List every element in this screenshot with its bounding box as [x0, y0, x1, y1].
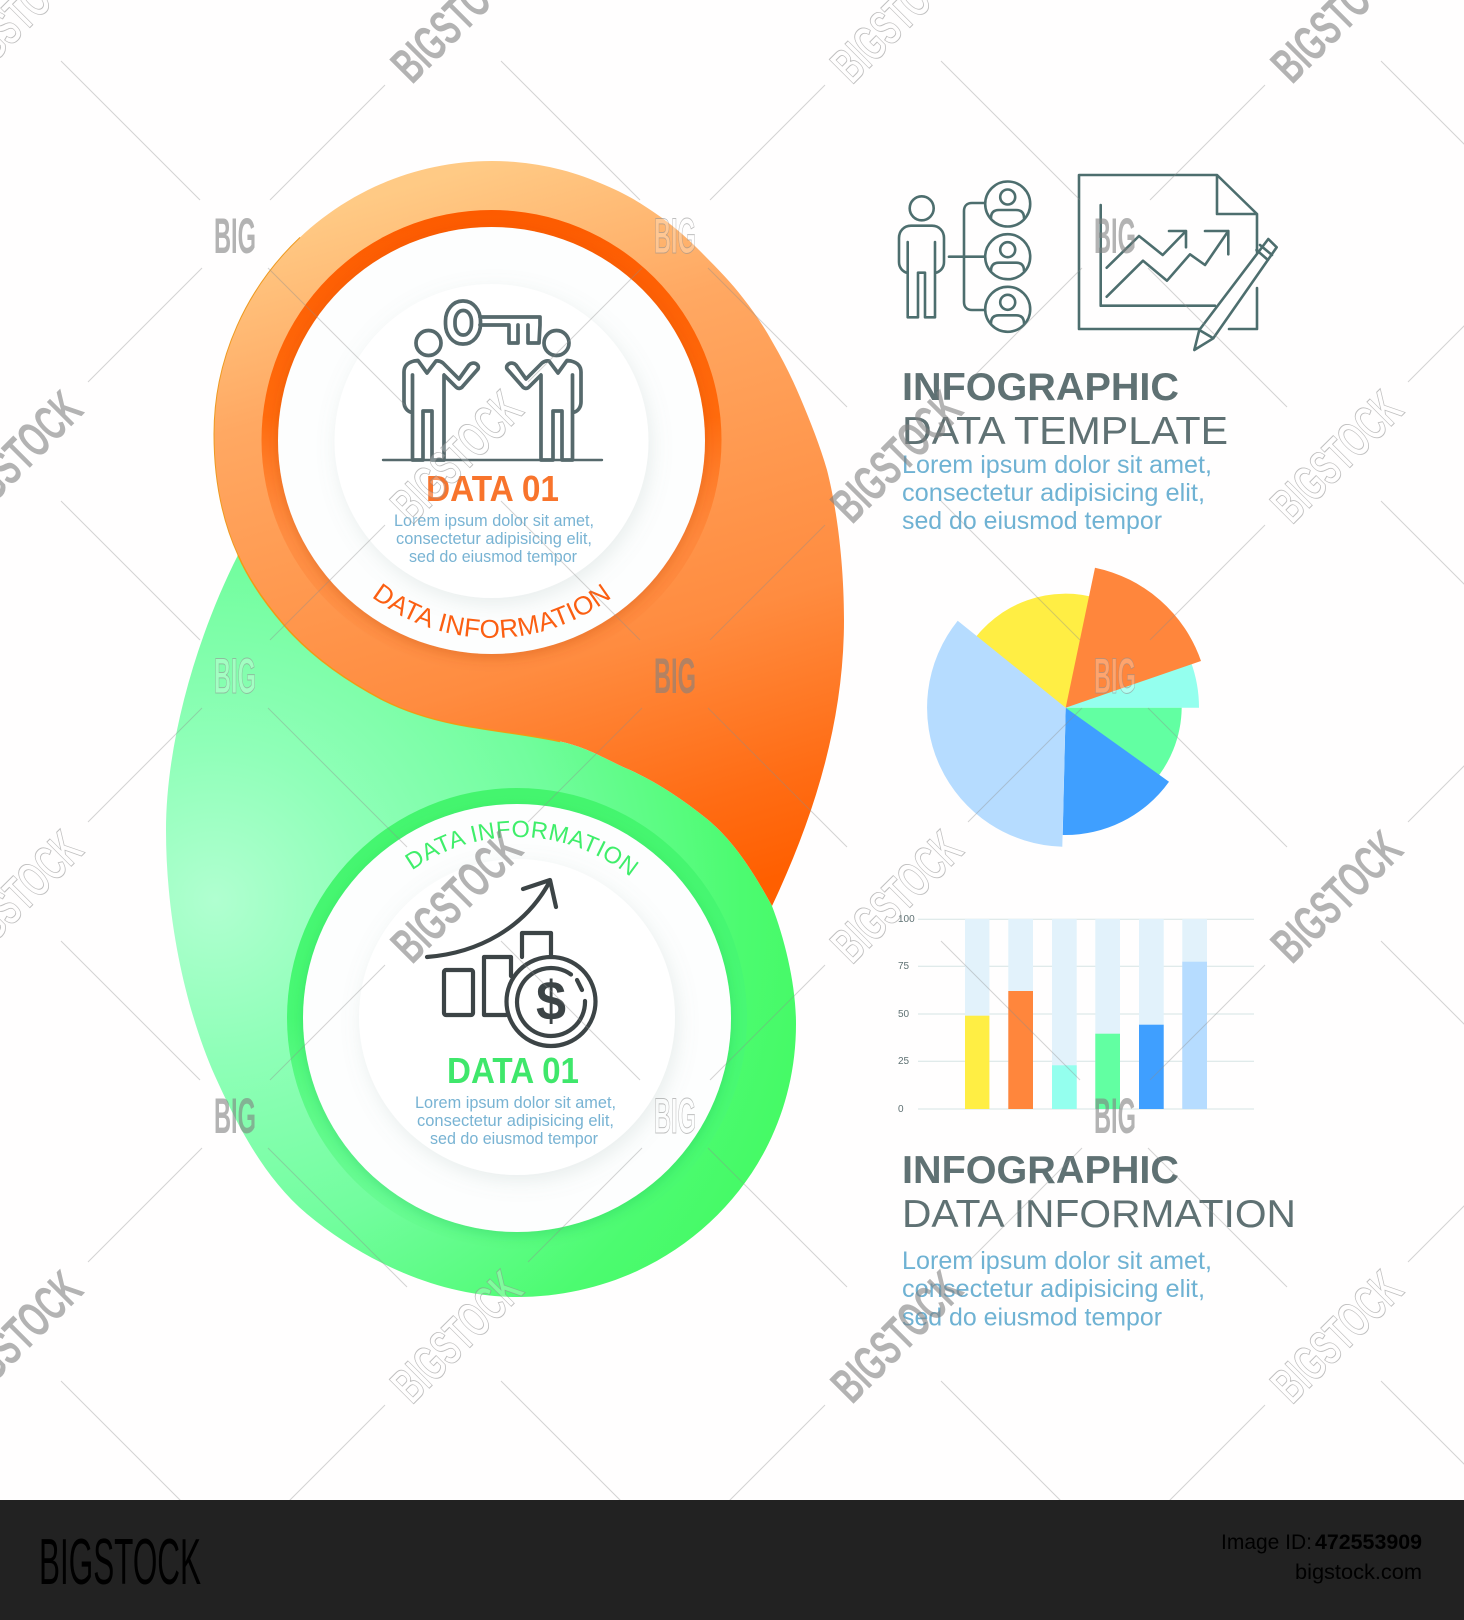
green shape: [166, 555, 796, 1297]
icon: two men passing a key: [383, 301, 602, 460]
heading: data template: [902, 366, 1228, 453]
icon: person with org branches: [899, 182, 1030, 332]
curved label: green: DATA INFORMATION: [404, 820, 639, 876]
text block: orange circle: consectetur adipisicing elit,: [396, 529, 592, 548]
watermark: BIGSTOCK marks: BIGSTOCK: [820, 1260, 973, 1413]
heading: data information: INFOGRAPHIC: [902, 1149, 1179, 1192]
text: BIG: [1094, 1088, 1136, 1144]
dollar sign: $: [536, 969, 566, 1032]
orange shape: [214, 161, 844, 906]
site url: bigstock.com: [1295, 1561, 1422, 1584]
orange ring: [262, 210, 722, 670]
watermark: BIG marks: BIG: [654, 1088, 696, 1144]
icon: document with chart and pencil: [1079, 175, 1277, 350]
curved label: orange: DATA INFORMATION: [373, 583, 610, 638]
image id: 472553909: [1315, 1531, 1422, 1554]
axis labels: 100: [898, 914, 915, 925]
text: BIG: [1094, 648, 1136, 704]
green ring: [287, 788, 747, 1248]
axis labels: 25: [898, 1056, 910, 1067]
watermark: BIGSTOCK marks: BIGSTOCK: [380, 820, 533, 973]
bar values: [965, 962, 1207, 1109]
text block: data template: [902, 451, 1212, 535]
heading: data template: INFOGRAPHIC: [902, 366, 1179, 409]
text block: green circle: consectetur adipisicing elit,: [417, 1111, 614, 1130]
watermark: BIGSTOCK marks: BIGSTOCK: [820, 820, 973, 973]
watermark: BIG marks: BIG: [214, 648, 256, 704]
heading: DATA 01 orange: DATA 01: [426, 468, 559, 509]
watermark: BIGSTOCK marks: BIGSTOCK: [380, 1260, 533, 1413]
watermark: BIG marks: BIG: [654, 208, 696, 264]
panel: green teardrop: [166, 555, 796, 1297]
orange seam along the S curve: [238, 555, 560, 742]
watermark: BIGSTOCK marks: BIGSTOCK: [380, 380, 533, 533]
image id: [1221, 1531, 1422, 1554]
chart: bar chart: [898, 914, 1254, 1115]
text block: data information: [902, 1247, 1212, 1332]
text block: orange circle: [394, 511, 594, 566]
white disc: [303, 804, 731, 1232]
inner plate: [334, 284, 648, 598]
heading: data information: [902, 1149, 1296, 1236]
text block: green circle: sed do eiusmod tempor: [430, 1129, 598, 1148]
text block: data information: sed do eiusmod tempor: [902, 1304, 1162, 1332]
watermark: BIG marks: BIG: [654, 648, 696, 704]
bar tracks: [965, 919, 1207, 1109]
text block: orange circle: sed do eiusmod tempor: [409, 547, 577, 566]
footer bar: BIGSTOCK: [39, 1525, 201, 1598]
inner plate: [359, 859, 675, 1175]
axis labels: 0: [898, 1104, 904, 1115]
text block: green circle: [415, 1093, 616, 1148]
heading: data information: DATA INFORMATION: [902, 1193, 1296, 1236]
axis labels: 75: [898, 961, 910, 972]
orange left edge: [214, 161, 492, 555]
watermark: BIG marks: [214, 208, 1136, 1144]
axis labels: 50: [898, 1009, 910, 1020]
text block: data template: Lorem ipsum dolor sit amet,: [902, 451, 1212, 479]
heading: data template: DATA TEMPLATE: [902, 410, 1228, 453]
text block: data template: sed do eiusmod tempor: [902, 507, 1162, 535]
image id: Image ID:: [1221, 1531, 1312, 1554]
white disc: [278, 227, 705, 654]
watermark: BIG marks: BIG: [214, 208, 256, 264]
chart: exploded pie: [927, 568, 1201, 847]
text block: data information: Lorem ipsum dolor sit amet,: [902, 1247, 1212, 1275]
footer bar: [0, 1500, 1464, 1620]
icon: growth chart with dollar coin: [427, 880, 596, 1046]
text block: orange circle: Lorem ipsum dolor sit amet,: [394, 511, 594, 530]
text block: data template: consectetur adipisicing elit,: [902, 479, 1205, 507]
heading: DATA 01 green: DATA 01: [447, 1050, 579, 1091]
text block: green circle: Lorem ipsum dolor sit amet,: [415, 1093, 616, 1112]
axis labels: [898, 914, 915, 1115]
watermark: BIGSTOCK marks: BIGSTOCK: [820, 380, 973, 533]
text: BIG: [1094, 208, 1136, 264]
panel: orange teardrop: [214, 161, 844, 906]
watermark: BIG marks: BIG: [214, 1088, 256, 1144]
text block: data information: consectetur adipisicing elit,: [902, 1275, 1205, 1303]
